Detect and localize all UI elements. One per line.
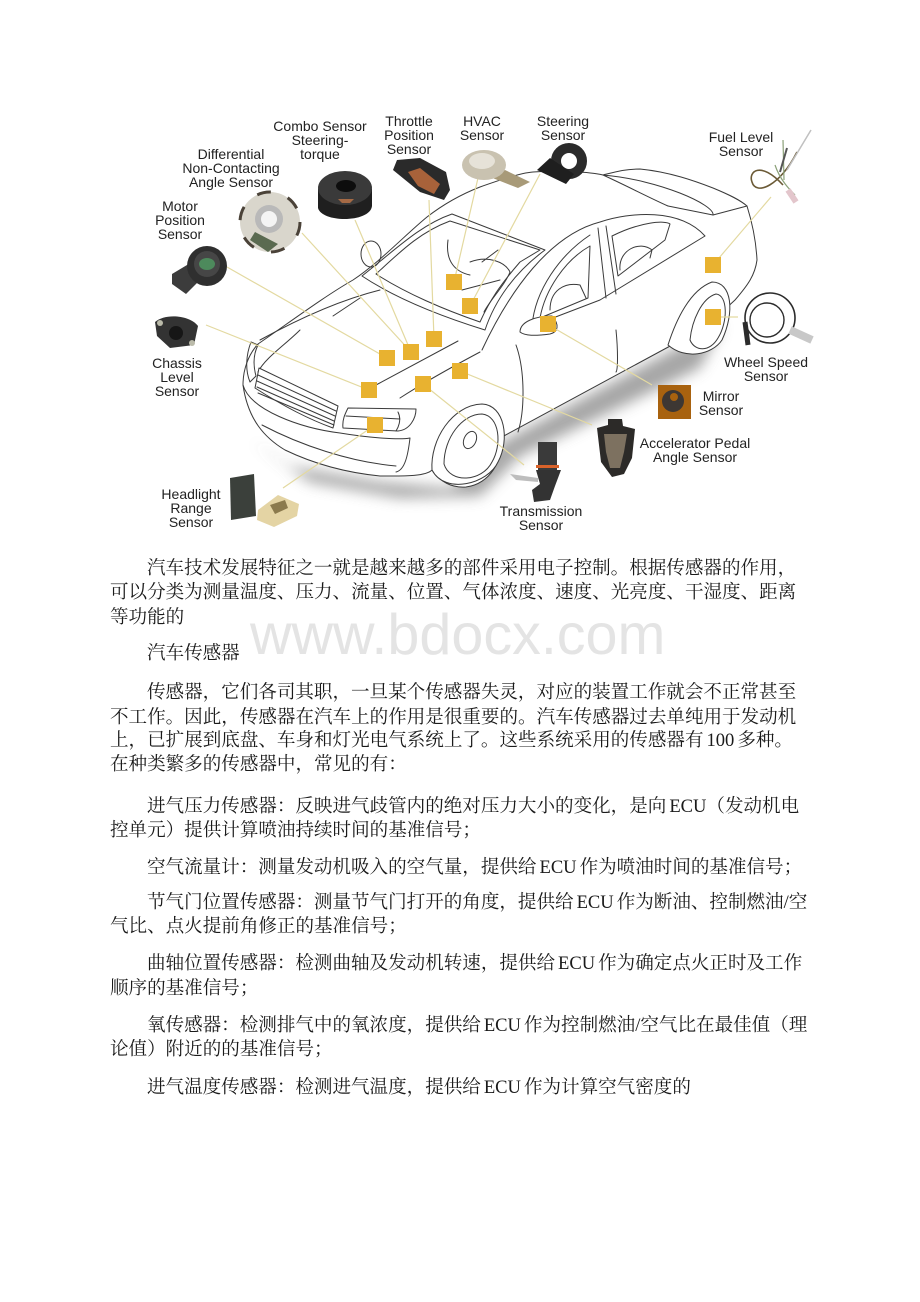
A pillar bump <box>361 241 381 267</box>
label: accelerator pedal sensor: Accelerator Pedal <box>640 435 750 451</box>
icon: throttle position sensor <box>393 158 450 200</box>
heading: 汽车传感器: 汽车传感器 <box>147 639 240 665</box>
leader lines <box>206 174 771 488</box>
watermark: www.bdocx.com <box>250 603 665 667</box>
label: throttle position sensor: Sensor <box>387 141 432 157</box>
label: HVAC sensor: HVAC <box>463 113 501 129</box>
label: throttle position sensor: Position <box>384 127 434 143</box>
paragraph: throttle position sensor: 气比、点火提前角修正的基准信号； <box>110 912 407 938</box>
icon: mirror sensor <box>658 385 691 419</box>
label: mirror sensor: Sensor <box>699 402 744 418</box>
headlights <box>343 408 416 431</box>
label: differential sensor: Differential <box>198 146 264 162</box>
car body <box>243 169 757 487</box>
rear wheel <box>668 282 730 354</box>
paragraph: intake temperature sensor: 进气温度传感器：检测进气温度，提供给ECU作为计算空气密度的 <box>147 1073 691 1099</box>
label: steering sensor: Steering <box>537 113 589 129</box>
label: steering sensor: Sensor <box>541 127 586 143</box>
label: HVAC sensor: Sensor <box>460 127 505 143</box>
paragraph: intro: 汽车技术发展特征之一就是越来越多的部件采用电子控制。根据传感器的作用， <box>147 554 796 580</box>
paragraph: intro <box>110 554 796 629</box>
label: mirror sensor: Mirror <box>703 388 740 404</box>
seats in side windows <box>550 246 652 310</box>
label: motor position sensor: Position <box>155 212 205 228</box>
label: accelerator pedal sensor: Angle Sensor <box>653 449 737 465</box>
label: wheel speed sensor: Wheel Speed <box>724 354 808 370</box>
label: transmission sensor: Transmission <box>500 503 582 519</box>
icon: headlight range sensor <box>230 474 299 527</box>
paragraph: crankshaft position sensor: 顺序的基准信号； <box>110 974 258 1000</box>
icon: fuel level sensor <box>751 130 811 202</box>
paragraph: air flow meter: 空气流量计：测量发动机吸入的空气量，提供给ECU作为喷油时间的基准信号； <box>147 853 802 879</box>
paragraph: crankshaft position sensor <box>110 949 802 1000</box>
front wheel <box>432 404 504 484</box>
label: chassis level sensor: Chassis <box>152 355 202 371</box>
icon: HVAC sensor <box>462 150 530 188</box>
icon: differential angle sensor <box>240 192 300 252</box>
hood crease <box>258 290 380 372</box>
paragraph: intake pressure sensor <box>110 792 799 842</box>
label: differential sensor: Angle Sensor <box>189 174 273 190</box>
paragraph: sensors overview: 在种类繁多的传感器中，常见的有： <box>110 750 407 776</box>
car shadow <box>250 325 722 498</box>
icon: accelerator pedal sensor <box>597 419 635 477</box>
paragraph: sensors overview: 不工作。因此，传感器在汽车上的作用是很重要的。汽车传感器过去单纯用于发动机 <box>110 703 796 729</box>
label: headlight range sensor: Sensor <box>169 514 214 530</box>
label: combo sensor: Steering- <box>292 132 349 148</box>
paragraph: intro: 可以分类为测量温度、压力、流量、位置、气体浓度、速度、光亮度、干湿度、距离 <box>110 578 796 604</box>
paragraph: sensors overview <box>110 678 796 776</box>
paragraph: intake pressure sensor: 控单元）提供计算喷油持续时间的基准信号； <box>110 816 481 842</box>
paragraph: oxygen sensor: 论值）附近的的基准信号； <box>110 1035 333 1061</box>
paragraph: throttle position sensor <box>110 888 807 938</box>
label: wheel speed sensor: Sensor <box>744 368 789 384</box>
windscreen <box>376 221 540 322</box>
icon: wheel speed sensor <box>745 293 812 345</box>
side windows <box>540 222 670 318</box>
bumper <box>243 385 410 472</box>
paragraph: sensors overview: 传感器，它们各司其职，一旦某个传感器失灵，对应的装置工作就会不正常甚至 <box>147 678 796 704</box>
label: transmission sensor: Sensor <box>519 517 564 533</box>
icon: transmission sensor <box>510 442 561 502</box>
paragraph: oxygen sensor <box>110 1011 807 1061</box>
label: headlight range sensor: Headlight <box>161 486 221 502</box>
label: combo sensor: torque <box>300 146 340 162</box>
mirror <box>520 316 557 335</box>
icon: chassis level sensor <box>155 316 198 348</box>
label: throttle position sensor: Throttle <box>385 113 433 129</box>
label: motor position sensor: Sensor <box>158 226 203 242</box>
paragraph: intake pressure sensor: 进气压力传感器：反映进气歧管内的绝对压力大小的变化，是向ECU（发动机电 <box>147 792 799 818</box>
label: chassis level sensor: Level <box>160 369 194 385</box>
icon: combo sensor <box>318 171 372 219</box>
car sensor diagram <box>152 113 814 533</box>
paragraph: oxygen sensor: 氧传感器：检测排气中的氧浓度，提供给ECU作为控制燃油/空气比在最佳值（理 <box>147 1011 807 1037</box>
paragraph: sensors overview: 上，已扩展到底盘、车身和灯光电气系统上了。这些系统采用的传感器有100多种。 <box>110 726 793 752</box>
grille <box>255 368 338 428</box>
side roof frame <box>482 214 705 350</box>
interior seats <box>448 240 510 312</box>
icon: steering sensor <box>537 148 582 184</box>
label: combo sensor: Combo Sensor <box>273 118 367 134</box>
label: differential sensor: Non-Contacting <box>182 160 280 176</box>
sensor location markers <box>361 257 721 433</box>
sensor labels <box>152 113 808 533</box>
car line drawing <box>243 169 757 487</box>
label: fuel level sensor: Fuel Level <box>709 129 773 145</box>
trunk <box>603 175 747 215</box>
label: fuel level sensor: Sensor <box>719 143 764 159</box>
label: chassis level sensor: Sensor <box>155 383 200 399</box>
label: headlight range sensor: Range <box>170 500 212 516</box>
paragraph: throttle position sensor: 节气门位置传感器：测量节气门打开的角度，提供给ECU作为断油、控制燃油/空 <box>147 888 807 914</box>
paragraph: intro: 等功能的 <box>110 603 184 629</box>
label: motor position sensor: Motor <box>162 198 198 214</box>
headlight left <box>247 342 258 382</box>
icon: motor position sensor <box>172 246 227 294</box>
door lines <box>516 330 618 432</box>
paragraph: crankshaft position sensor: 曲轴位置传感器：检测曲轴及发动机转速，提供给ECU作为确定点火正时及工作 <box>147 949 802 975</box>
